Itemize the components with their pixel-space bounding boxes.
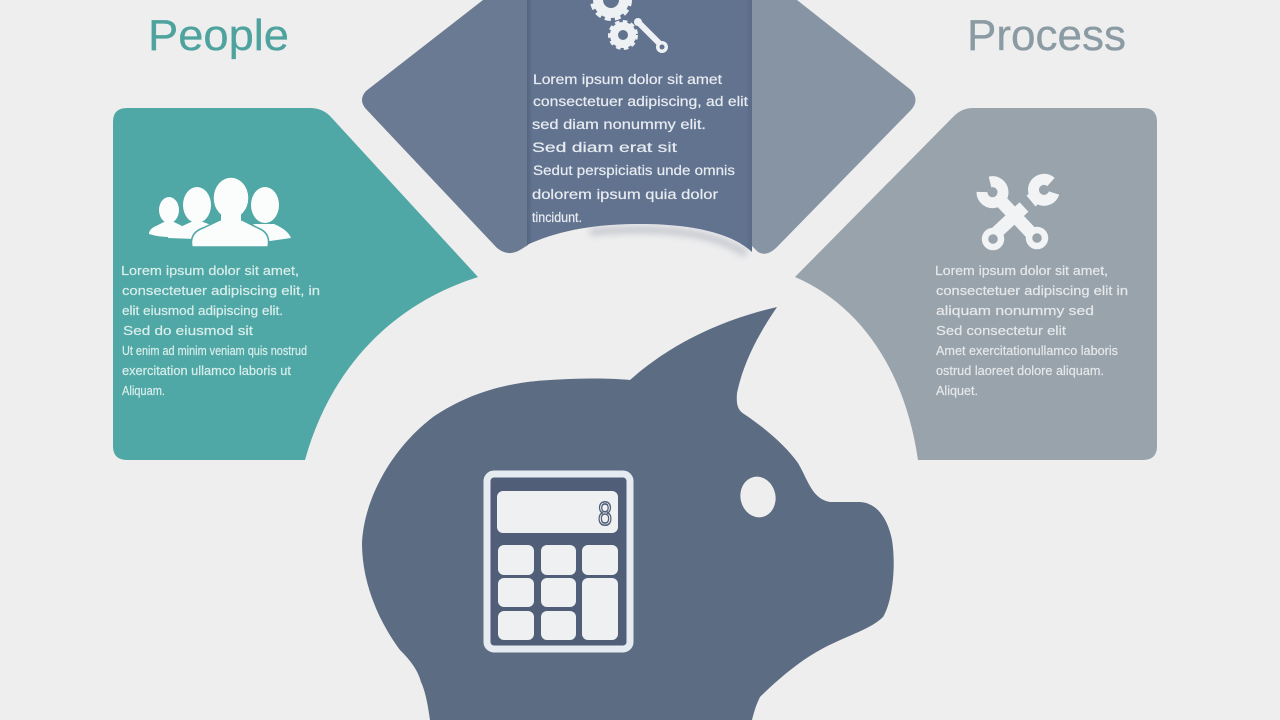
heading: People: People: [148, 11, 289, 60]
text block: center description: Sed diam erat sit: [532, 140, 677, 155]
text block: people description: Sed do eiusmod sit: [123, 323, 253, 338]
back wrench: [995, 207, 1024, 234]
text block: people description: exercitation ullamco laboris ut: [122, 363, 291, 378]
text block: people description: consectetuer adipiscing elit, in: [122, 283, 320, 298]
text block: center description: Sedut perspiciatis unde omnis: [533, 163, 735, 178]
calculator buttons: [498, 545, 618, 640]
front wrench: [997, 197, 1033, 235]
panel: process: [795, 108, 1157, 460]
text block: people description: elit eiusmod adipiscing elit.: [122, 303, 283, 318]
text block: process description: ostrud laoreet dolore aliquam.: [936, 363, 1104, 378]
panel: people: [113, 108, 478, 460]
text block: process description: Amet exercitationullamco laboris: [936, 343, 1118, 358]
text block: process description: Aliquet.: [936, 383, 978, 398]
icon: calculator: [487, 474, 630, 649]
pig eye: [737, 473, 779, 521]
text block: process description: aliquam nonummy sed: [936, 303, 1094, 318]
text block: people description: Lorem ipsum dolor sit amet,: [121, 263, 299, 278]
diamond left wing: [362, 0, 528, 253]
piggy bank: [362, 307, 894, 720]
calculator display: [497, 491, 618, 533]
icon: group of people: [149, 177, 291, 247]
text block: people description: Ut enim ad minim veniam quis nostrud: [122, 343, 307, 358]
icon: crossed wrenches: [982, 179, 1054, 247]
center strip: [527, 0, 752, 252]
icon: gears and wrench: [592, 0, 668, 53]
text block: center description: Lorem ipsum dolor sit amet: [533, 72, 722, 87]
heading: Process: Process: [967, 11, 1126, 60]
text block: center description: tincidunt.: [532, 210, 582, 225]
text block: process description: [935, 263, 1128, 398]
text block: process description: consectetuer adipiscing elit in: [936, 283, 1128, 298]
text block: process description: Lorem ipsum dolor sit amet,: [935, 263, 1108, 278]
text block: people description: Aliquam.: [122, 383, 165, 398]
text block: people description: [121, 263, 320, 398]
text block: center description: consectetuer adipiscing, ad elit: [533, 94, 748, 109]
calculator display: 8: [598, 495, 612, 532]
diamond right wing: [752, 0, 916, 254]
text block: center description: dolorem ipsum quia dolor: [532, 187, 719, 202]
arc shadow: [590, 230, 746, 254]
text block: center description: sed diam nonummy elit.: [532, 117, 706, 132]
text block: center description: [532, 72, 748, 225]
panel: center diamond: [362, 0, 916, 254]
text block: process description: Sed consectetur elit: [936, 323, 1066, 338]
